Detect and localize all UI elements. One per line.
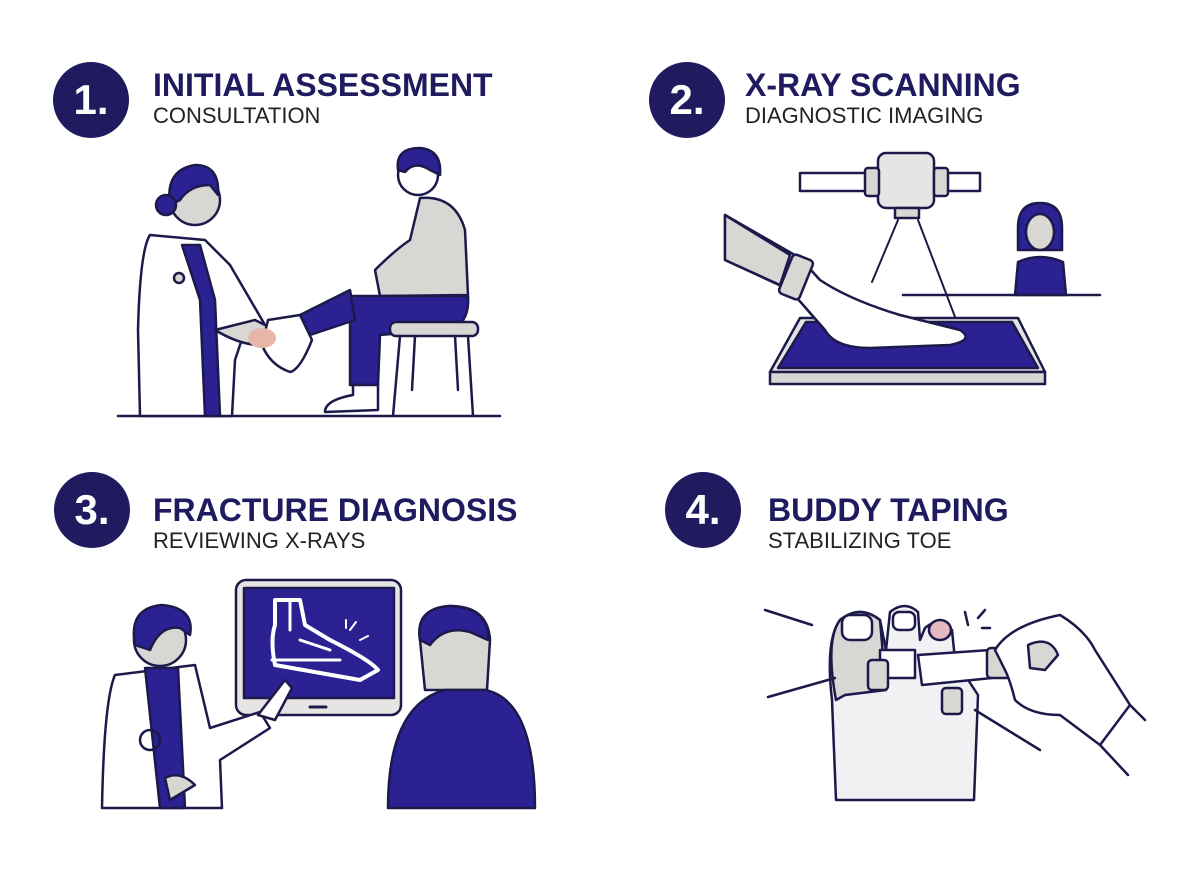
heading 2: X-RAY SCANNING: [745, 67, 1021, 103]
badge 4: 4.: [685, 486, 721, 533]
badge 1: [53, 62, 129, 138]
heading 3: REVIEWING X-RAYS: [153, 528, 365, 553]
plate: [770, 318, 1045, 372]
heading 1: CONSULTATION: [153, 103, 320, 128]
leg: [725, 215, 966, 348]
heading 4: STABILIZING TOE: [768, 528, 951, 553]
heading 1: [153, 67, 493, 128]
illustration: buddy taping: [765, 606, 1145, 800]
heading 2: [745, 67, 1021, 128]
hand: [995, 615, 1130, 745]
badge 4: [665, 472, 741, 548]
heading 2: DIAGNOSTIC IMAGING: [745, 103, 983, 128]
illustration: consultation: [118, 148, 500, 416]
doctor: [102, 605, 292, 808]
illustration: diagnosis: [102, 580, 535, 808]
illustration: x-ray: [725, 153, 1100, 384]
patient: [248, 148, 478, 416]
technician: [903, 203, 1100, 295]
heading 4: BUDDY TAPING: [768, 492, 1009, 528]
scanner arm: [800, 153, 980, 330]
heading 3: FRACTURE DIAGNOSIS: [153, 492, 517, 528]
patient: [388, 606, 535, 808]
badge 1: 1.: [73, 76, 109, 123]
heading 3: [153, 492, 517, 553]
heading 1: INITIAL ASSESSMENT: [153, 67, 493, 103]
monitor: [236, 580, 401, 715]
badge 2: 2.: [669, 76, 705, 123]
badge 3: [54, 472, 130, 548]
doctor: [138, 165, 275, 416]
badge 2: [649, 62, 725, 138]
badge 3: 3.: [74, 486, 110, 533]
heading 4: [768, 492, 1009, 553]
